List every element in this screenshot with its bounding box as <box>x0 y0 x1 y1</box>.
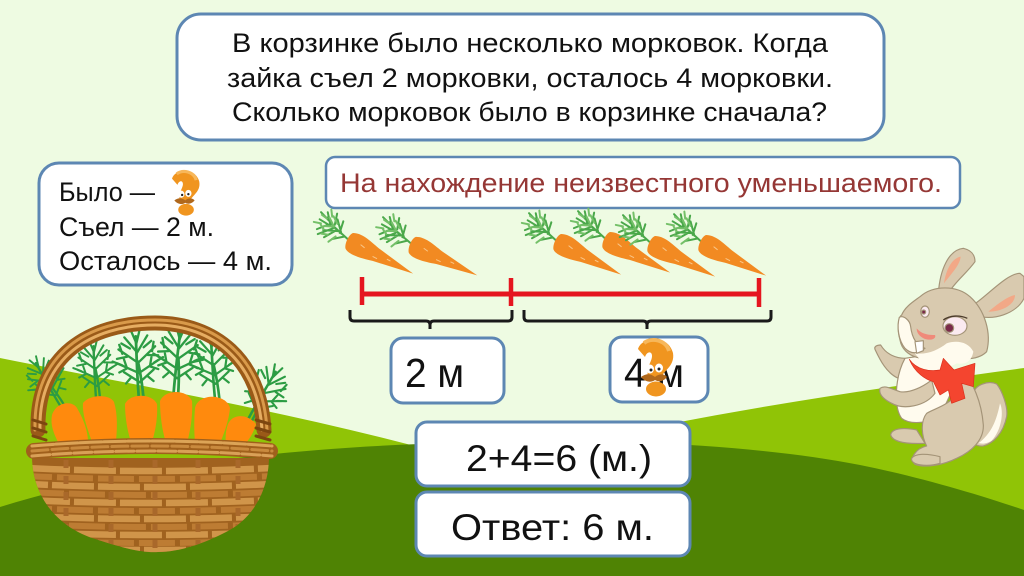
pupil <box>945 324 954 332</box>
panel: short record: Осталось — 4 м. <box>59 246 272 276</box>
label box: 2 m <box>391 338 504 403</box>
panel: problem statement: Сколько морковок было в корзинке сначала? <box>232 97 827 127</box>
answer box: Ответ: 6 м. <box>451 507 654 548</box>
nose <box>917 328 935 340</box>
panel: problem statement <box>177 14 884 140</box>
brace: eaten part <box>350 310 512 329</box>
basket handle <box>33 320 270 440</box>
right eye <box>943 317 967 335</box>
front arm <box>880 380 935 407</box>
side ear <box>972 273 1024 317</box>
bunny character <box>875 248 1024 466</box>
panel: short record: Съел — 2 м. <box>59 212 214 242</box>
back and haunch <box>913 370 983 466</box>
carrots row: four left <box>517 204 775 286</box>
back foot <box>891 429 925 444</box>
muzzle <box>898 317 925 353</box>
red segment diagram <box>361 277 759 307</box>
tail <box>972 383 1007 446</box>
panel: problem statement: В корзинке было несколько морковок. Когда <box>232 28 829 58</box>
front foot <box>912 454 940 465</box>
brace: remaining part <box>524 310 771 329</box>
basket rim <box>32 441 272 456</box>
side ear inner <box>988 295 1015 312</box>
carrots row: two eaten <box>309 205 486 285</box>
label box: 4 m: 4 м <box>624 350 684 396</box>
red bow scarf <box>909 358 975 403</box>
panel: problem type heading: На нахождение неизвестного уменьшаемого. <box>340 168 942 198</box>
panel: short record: Было — <box>59 177 155 207</box>
label box: 4 m <box>610 337 708 402</box>
icon: question mark over 4 m <box>638 339 673 396</box>
left pupil <box>922 310 926 314</box>
label box: 2 m: 2 м <box>405 350 464 396</box>
upright ear <box>938 248 975 293</box>
upright ear inner <box>944 257 961 283</box>
left eye <box>921 306 929 317</box>
carrots in basket <box>51 392 256 443</box>
brow <box>943 316 967 320</box>
solution box <box>416 422 690 486</box>
teeth <box>915 341 923 353</box>
basket body <box>28 455 273 555</box>
panel: problem type heading <box>326 157 960 208</box>
panel: short record <box>39 163 292 285</box>
belly <box>896 355 960 423</box>
tail fur <box>978 403 1002 444</box>
carrot basket <box>15 320 299 555</box>
panel: problem statement: зайка съел 2 морковки, осталось 4 морковки. <box>227 63 833 93</box>
head <box>898 288 988 359</box>
solution box: 2+4=6 (м.) <box>466 438 652 479</box>
chin ruff <box>915 342 973 367</box>
icon: question mark in record <box>172 171 199 216</box>
answer box <box>416 492 690 556</box>
raised arm <box>875 345 905 378</box>
carrot tops <box>15 324 299 433</box>
